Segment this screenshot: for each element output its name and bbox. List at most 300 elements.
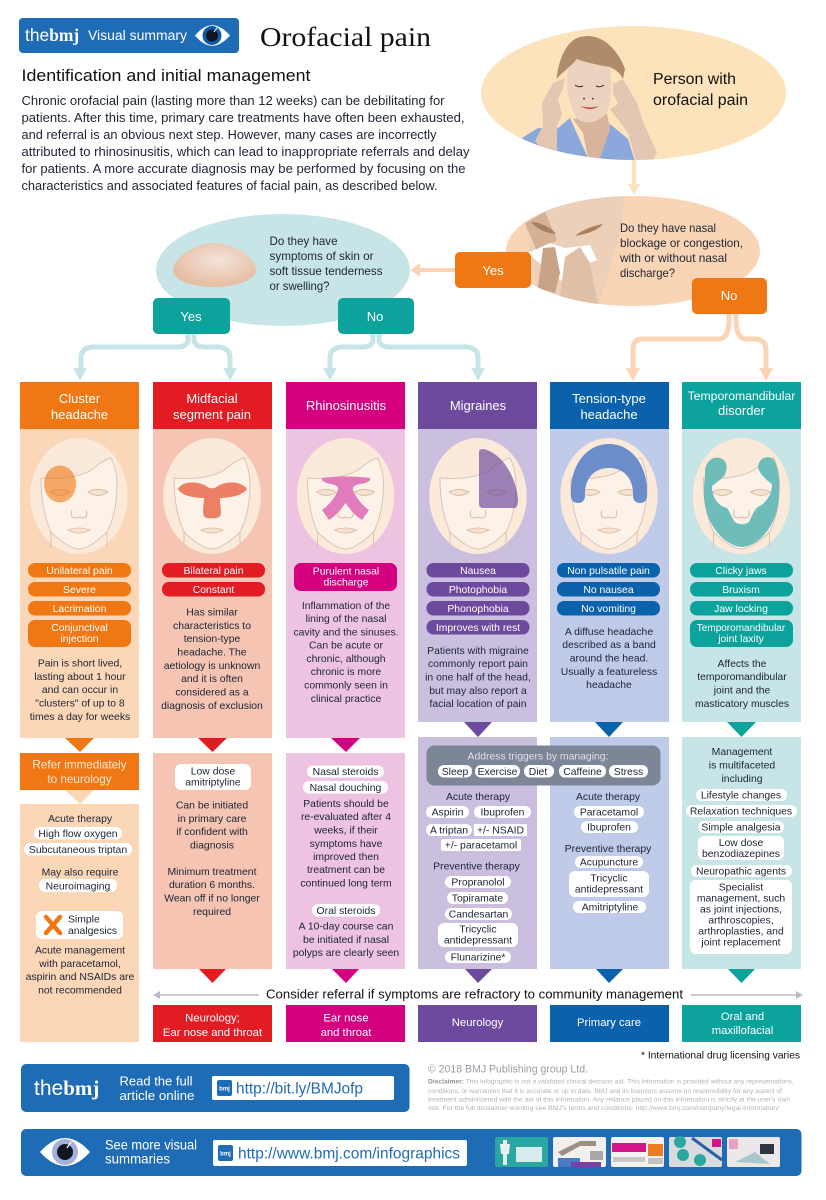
copyright and disclaimer: Disclaimer: This infographic is not a validated clinical decision aid. This information is provided without any representations, xyxy=(428,1078,794,1086)
panel: midfacial management xyxy=(153,753,272,969)
pill: no nausea xyxy=(557,582,660,596)
pill: unilateral pain xyxy=(28,563,131,578)
pill: caffeine xyxy=(559,765,606,778)
pill: paracetamol: +/- paracetamol xyxy=(445,840,517,852)
pill: jaw locking xyxy=(690,601,793,616)
pill: conjunctival injection: Conjunctival xyxy=(51,623,108,634)
pill: phonophobia xyxy=(426,601,530,616)
description: commonly report pain xyxy=(428,659,528,670)
description: cavity and the sinuses. xyxy=(293,628,399,638)
description: aspirin and NSAIDs are xyxy=(26,972,135,983)
description: Minimum treatment xyxy=(168,867,257,878)
description: and can occur in xyxy=(42,685,118,696)
face: midfacial pain area xyxy=(163,438,261,554)
link: bit.ly xyxy=(212,1076,394,1100)
column: cluster headache xyxy=(20,382,139,738)
description: in one half of the head, xyxy=(425,672,531,684)
pill: specialist management xyxy=(690,880,792,954)
box: refer immediately to neurology: to neurology xyxy=(47,773,112,786)
pill: high flow oxygen: High flow oxygen xyxy=(38,829,118,840)
pill: paracetamol: Paracetamol xyxy=(580,808,638,818)
pill: no vomiting: No vomiting xyxy=(581,604,636,615)
column: migraines xyxy=(418,382,537,722)
column header: segment pain xyxy=(173,407,251,422)
column header xyxy=(682,382,801,429)
label xyxy=(653,71,748,109)
label: orofacial pain xyxy=(653,92,748,109)
panel: rhinosinusitis management xyxy=(286,753,405,969)
box: refer neurology xyxy=(418,1005,537,1042)
question text: Do they have nasal xyxy=(620,222,716,235)
pill: sleep xyxy=(438,765,472,778)
pill: bruxism: Bruxism xyxy=(722,585,760,596)
pill: specialist management: management, such xyxy=(697,894,785,904)
column header: Cluster xyxy=(59,391,101,406)
description: re-evaluated after 4 xyxy=(301,812,391,823)
column header: Midfacial xyxy=(186,391,238,406)
description: treatment can be xyxy=(307,865,385,876)
illustration: woman holding head xyxy=(522,36,657,165)
arrow: person to nasal question xyxy=(628,158,640,195)
button: skin no xyxy=(338,298,414,334)
description xyxy=(30,658,130,723)
button: nasal no: No xyxy=(721,288,737,303)
panel: nasal question xyxy=(506,190,760,310)
description: times a day for weeks xyxy=(30,712,130,723)
pill: nsaid: +/- NSAID xyxy=(477,826,524,836)
pill: severe: Severe xyxy=(63,585,96,596)
pill: conjunctival injection xyxy=(28,620,131,647)
subtitle: Identification and initial management xyxy=(22,67,311,85)
copyright and disclaimer: risk. For the full disclaimer wording see BMJ's terms and conditions: http://www.bmj.com/company/legal-information/ xyxy=(428,1105,779,1112)
button: skin no: No xyxy=(367,309,383,324)
description: Management xyxy=(712,747,772,758)
pill: nausea xyxy=(426,563,530,578)
column header: headache xyxy=(580,407,638,422)
connector: skin yes xyxy=(81,334,230,375)
pill: aspirin xyxy=(426,806,469,818)
description: is multifaceted xyxy=(709,760,775,772)
panel: migraines management xyxy=(418,737,537,969)
pill: tricyclic antidepressant: antidepressant xyxy=(575,884,643,896)
question text: or swelling? xyxy=(270,280,330,293)
column header: Migraines xyxy=(450,398,507,413)
column: midfacial segment pain xyxy=(153,382,272,738)
pill: subcutaneous triptan: Subcutaneous triptan xyxy=(29,845,127,856)
description: including xyxy=(721,774,763,785)
pill: specialist management: arthroplasties, and xyxy=(698,926,784,938)
pill: neuropathic agents: Neuropathic agents xyxy=(696,866,786,878)
description xyxy=(164,800,260,918)
pill: purulent nasal discharge: discharge xyxy=(323,578,369,588)
link: bit.ly: http://bit.ly/BMJofp xyxy=(236,1080,363,1098)
pill: specialist management: joint replacement xyxy=(700,938,781,948)
description: Wean off if no longer xyxy=(164,894,260,904)
pill: topiramate: Topiramate xyxy=(452,894,503,904)
label: acute therapy: Acute therapy xyxy=(576,792,641,803)
description: lining of the nasal xyxy=(306,614,386,625)
description: if confident with xyxy=(176,827,248,838)
face: band around head xyxy=(560,438,658,554)
arrowheads into columns xyxy=(73,368,773,381)
illustration: skin swelling xyxy=(173,243,256,287)
panel: skin question xyxy=(156,214,410,326)
copyright and disclaimer: © 2018 BMJ Publishing group Ltd. xyxy=(428,1064,588,1076)
pill: clicky jaws: Clicky jaws xyxy=(715,566,767,577)
pill: amitriptyline: Amitriptyline xyxy=(582,902,639,914)
face: jaw and muscles area xyxy=(693,438,790,554)
description: diagnosis xyxy=(190,840,234,852)
icon: eye xyxy=(195,25,230,46)
pill: lifestyle changes: Lifestyle changes xyxy=(701,790,781,802)
panel: temporomandibular management xyxy=(682,737,801,969)
button: skin yes xyxy=(153,298,230,334)
box: refer neurology ent xyxy=(153,1005,272,1042)
description: facial location of pain xyxy=(429,699,527,710)
description xyxy=(425,646,531,710)
description: Usually a featureless xyxy=(561,667,657,678)
pill: stress: Stress xyxy=(614,767,643,778)
description: lasting about 1 hour xyxy=(34,672,126,683)
banner: read the full article xyxy=(21,1064,410,1112)
pill: neuroimaging xyxy=(39,879,117,892)
description: chronic is more xyxy=(311,667,381,678)
description: in primary care xyxy=(178,814,247,825)
thumbnails: other visual summaries xyxy=(495,1136,780,1167)
panel: cluster headache management xyxy=(20,790,139,1042)
column header: disorder xyxy=(718,403,766,418)
pill: temporomandibular joint laxity: joint laxity xyxy=(717,634,765,645)
button: skin yes: Yes xyxy=(180,309,202,324)
title: Orofacial pain xyxy=(260,22,432,52)
box: refer neurology ent: Neurology; xyxy=(185,1012,240,1024)
pill: aspirin: Aspirin xyxy=(432,808,464,818)
pill: temporomandibular joint laxity: Temporomandibular xyxy=(697,623,786,634)
pill: low dose benzodiazepines: benzodiazepines xyxy=(702,849,780,860)
intro text: and referral is an obvious next step. However, many cases are incorrectly xyxy=(22,127,437,142)
pill: severe xyxy=(28,582,131,596)
pill: diet xyxy=(524,765,554,778)
pill: simple analgesia: Simple analgesia xyxy=(701,822,781,834)
description: oral steroids xyxy=(293,922,399,959)
question text: symptoms of skin or xyxy=(270,250,374,263)
pill: specialist management: arthroscopies, xyxy=(708,916,774,926)
box: refer ear nose and throat: Ear nose xyxy=(323,1012,369,1024)
card: simple analgesics not recommended: Simple xyxy=(68,914,100,926)
pill: ibuprofen xyxy=(474,806,531,818)
description: Can be acute or xyxy=(309,640,384,652)
pill: tricyclic antidepressant xyxy=(438,923,518,947)
description: masticatory muscles xyxy=(695,699,789,710)
column: tension-type headache xyxy=(550,382,669,722)
description: described as a band xyxy=(562,640,656,651)
intro text xyxy=(22,93,470,193)
description: "clusters" of up to 8 xyxy=(35,698,125,710)
pill: constant xyxy=(162,582,265,596)
link: bit.ly: bmj xyxy=(219,1086,230,1092)
pill: a triptan: A triptan xyxy=(430,826,468,836)
description: Inflammation of the xyxy=(302,601,390,612)
description: diagnosis of exclusion xyxy=(161,701,263,712)
description: and it is often xyxy=(181,674,243,685)
description: oral steroids: be initiated if nasal xyxy=(303,935,389,946)
arrow: yes to skin question xyxy=(410,263,456,277)
description: with paracetamol, xyxy=(38,959,121,970)
header badge: the bmj visual summary xyxy=(19,18,239,53)
question text: discharge? xyxy=(620,267,676,280)
pill: lacrimation xyxy=(28,601,131,616)
description xyxy=(293,601,399,705)
panel: tension-type management xyxy=(550,737,669,969)
column header: headache xyxy=(51,407,108,422)
description: aetiology is unknown xyxy=(164,661,260,672)
column header: Temporomandibular xyxy=(688,389,795,403)
description: around the head. xyxy=(570,654,648,664)
box: address triggers xyxy=(426,746,660,786)
pill: photophobia xyxy=(426,582,530,596)
pill: low dose amitriptyline xyxy=(175,764,251,790)
pill: tricyclic antidepressant: Tricyclic xyxy=(459,924,497,936)
face: unilateral pain area xyxy=(30,438,128,554)
description: weeks, if their xyxy=(313,826,378,836)
pill: nausea: Nausea xyxy=(460,566,496,577)
referral line: Consider referral if symptoms are refractory to community management xyxy=(266,988,684,1002)
illustration: person blowing nose xyxy=(525,196,624,304)
pill: tricyclic antidepressant: Tricyclic xyxy=(590,874,628,884)
pill: low dose benzodiazepines xyxy=(698,836,784,860)
description: commonly seen in xyxy=(304,680,388,692)
description: Pain is short lived, xyxy=(38,658,122,670)
label: acute therapy: Acute therapy xyxy=(446,792,511,803)
pill: nasal steroids: Nasal steroids xyxy=(313,767,378,778)
pill: flunarizine: Flunarizine* xyxy=(451,952,505,964)
link: bmj infographics xyxy=(213,1140,467,1166)
column header xyxy=(20,382,139,429)
description: continued long term xyxy=(300,878,392,890)
box: refer ear nose and throat xyxy=(286,1005,405,1042)
label: may also require: May also require xyxy=(42,868,119,878)
description: joint and the xyxy=(713,686,771,696)
column: rhinosinusitis xyxy=(286,382,405,738)
pill: ibuprofen xyxy=(581,821,638,834)
pill: amitriptyline xyxy=(573,901,646,914)
pill: phonophobia: Phonophobia xyxy=(447,604,509,615)
pill: purulent nasal discharge: Purulent nasal xyxy=(313,566,379,578)
pill: acupuncture: Acupuncture xyxy=(580,858,638,868)
intro text: patients. After this time, primary care treatments have often been exhausted, xyxy=(22,110,464,125)
label: acute therapy: Acute therapy xyxy=(48,814,113,825)
description: Patients with migraine xyxy=(427,646,529,657)
pill: stress xyxy=(609,765,648,778)
description: characteristics to xyxy=(173,621,251,632)
box: refer immediately to neurology xyxy=(20,753,139,790)
pill: specialist management: Specialist xyxy=(719,882,763,894)
pill: low dose amitriptyline: amitriptyline xyxy=(185,778,241,788)
question text: soft tissue tenderness xyxy=(270,265,383,278)
column header: Rhinosinusitis xyxy=(306,398,387,413)
description xyxy=(161,608,263,712)
pill: candesartan: Candesartan xyxy=(449,910,508,920)
pill: photophobia: Photophobia xyxy=(449,585,507,596)
link: bmj infographics: bmj xyxy=(220,1152,231,1158)
pill: neuroimaging: Neuroimaging xyxy=(46,882,111,892)
pill: lacrimation: Lacrimation xyxy=(53,604,107,615)
link: bmj infographics: http://www.bmj.com/infographics xyxy=(238,1146,460,1162)
card: simple analgesics not recommended: analgesics xyxy=(68,926,117,937)
banner: read the full article: article online xyxy=(120,1088,194,1103)
pill: ibuprofen: Ibuprofen xyxy=(587,822,631,834)
column header xyxy=(153,382,272,429)
label: preventive therapy: Preventive therapy xyxy=(433,862,521,872)
connector: skin no xyxy=(330,334,478,375)
intro text: attributed to rhinosinusitis, which can lead to inappropriate referrals and delay xyxy=(22,144,470,159)
pill: oral steroids: Oral steroids xyxy=(317,906,375,917)
description: temporomandibular xyxy=(697,672,787,683)
copyright and disclaimer xyxy=(428,1064,794,1112)
banner: read the full article: Read the full xyxy=(120,1074,193,1088)
arrows: symptoms to management xyxy=(65,722,756,752)
question text xyxy=(619,222,743,280)
description: A diffuse headache xyxy=(565,627,653,638)
pill: temporomandibular joint laxity xyxy=(690,620,793,647)
pill: nasal douching: Nasal douching xyxy=(310,783,382,794)
header badge: the bmj visual summary: Visual summary xyxy=(88,28,187,43)
pill: bruxism xyxy=(690,582,793,596)
button: nasal yes: Yes xyxy=(482,263,504,278)
card: simple analgesics not recommended xyxy=(36,911,123,939)
banner: see more visual summaries xyxy=(21,1129,802,1176)
description: Acute management xyxy=(35,946,125,956)
description: clinical practice xyxy=(311,694,381,705)
pill: diet: Diet xyxy=(529,767,547,778)
pill: non pulsatile pain xyxy=(557,563,660,578)
pill: caffeine: Caffeine xyxy=(563,767,602,778)
intro text: characteristics and associated features of facial pain, as described below. xyxy=(22,178,438,193)
icon: eye xyxy=(40,1138,90,1166)
description: chronic, although xyxy=(306,654,386,665)
question text: blockage or congestion, xyxy=(620,237,743,250)
description xyxy=(695,659,789,710)
box: refer oral and maxillofacial: Oral and xyxy=(721,1011,764,1023)
description: duration 6 months. xyxy=(169,880,255,891)
box: refer immediately to neurology: Refer immediately xyxy=(32,758,127,772)
pill: sleep: Sleep xyxy=(442,767,469,778)
description: required xyxy=(193,907,231,918)
pill: bilateral pain xyxy=(162,563,265,578)
pill: improves with rest: Improves with rest xyxy=(436,623,520,634)
icon: orange cross xyxy=(46,917,60,933)
box: refer neurology ent: Ear nose and throat xyxy=(163,1027,263,1039)
question text: with or without nasal xyxy=(619,252,727,265)
pill: bilateral pain: Bilateral pain xyxy=(183,566,244,577)
box: refer oral and maxillofacial xyxy=(682,1005,801,1042)
box: refer primary care: Primary care xyxy=(577,1017,641,1029)
description: oral steroids: polyps are clearly seen xyxy=(293,948,399,959)
pill: tricyclic antidepressant: antidepressant xyxy=(444,936,512,946)
pill: specialist management: as joint injections, xyxy=(700,904,782,916)
pill: constant: Constant xyxy=(193,585,234,596)
face: half head pain area xyxy=(429,438,527,554)
box: refer oral and maxillofacial: maxillofacial xyxy=(712,1025,773,1037)
column header xyxy=(418,382,537,429)
intro text: for patients. A more accurate diagnosis may be performed by focusing on the xyxy=(22,161,466,176)
button: nasal yes xyxy=(455,252,531,288)
description: Patients should be xyxy=(303,799,389,810)
referral line xyxy=(153,988,803,1002)
header badge: the bmj visual summary: thebmj xyxy=(25,25,79,45)
pill: no nausea: No nausea xyxy=(583,585,634,596)
description xyxy=(26,946,135,996)
banner: see more visual summaries: summaries xyxy=(105,1150,170,1166)
copyright and disclaimer: treatment administered with the aid of this information. Any reliance placed on this information is strictly at the user's own xyxy=(428,1096,790,1104)
column header: Tension-type xyxy=(572,391,646,406)
description: considered as a xyxy=(175,688,249,698)
label: preventive therapy: Preventive therapy xyxy=(565,844,652,855)
description xyxy=(561,627,657,691)
pill: ibuprofen: Ibuprofen xyxy=(481,808,525,818)
question text xyxy=(270,235,383,293)
description: headache. The xyxy=(177,648,247,658)
pill: non pulsatile pain: Non pulsatile pain xyxy=(567,566,650,577)
description: symptoms have xyxy=(310,839,383,850)
description: but may also report a xyxy=(429,686,527,697)
description: oral steroids: A 10-day course can xyxy=(299,922,394,932)
banner: see more visual summaries: See more visual xyxy=(105,1136,197,1152)
copyright and disclaimer: conditions, or warranties that it is accurate or up to date. BMJ and its licensors assume no responsibility for any aspect of xyxy=(428,1088,782,1095)
pill: conjunctival injection: injection xyxy=(60,634,99,645)
panel: person with orofacial pain xyxy=(481,26,786,165)
box: refer neurology: Neurology xyxy=(452,1017,504,1029)
description: Affects the xyxy=(718,659,767,670)
banner: read the full article: thebmj xyxy=(34,1076,99,1100)
description xyxy=(300,799,392,890)
arrows: management to referral xyxy=(199,969,755,983)
intro text: Chronic orofacial pain (lasting more than 12 weeks) can be debilitating for xyxy=(22,93,445,108)
pill: low dose amitriptyline: Low dose xyxy=(191,766,235,778)
box: refer ear nose and throat: and throat xyxy=(321,1027,372,1039)
pill: propranolol: Propranolol xyxy=(451,878,505,888)
footnote: * International drug licensing varies xyxy=(641,1050,800,1062)
pill: low dose benzodiazepines: Low dose xyxy=(719,838,763,849)
connector: nasal no xyxy=(633,314,766,375)
pill: clicky jaws xyxy=(690,563,793,578)
box: refer primary care xyxy=(550,1005,669,1042)
description: Can be initiated xyxy=(176,800,248,812)
description: improved then xyxy=(313,852,379,863)
description: headache xyxy=(586,680,632,691)
question text: Do they have xyxy=(270,235,338,248)
description xyxy=(709,747,775,785)
box: address triggers: Address triggers by managing: xyxy=(468,752,608,762)
column header xyxy=(286,382,405,429)
column: temporomandibular disorder xyxy=(682,382,801,722)
pill: jaw locking: Jaw locking xyxy=(714,604,768,615)
column header xyxy=(550,382,669,429)
face: sinus area xyxy=(297,438,394,554)
button: nasal no xyxy=(692,278,767,314)
description: Has similar xyxy=(186,608,238,618)
pill: relaxation techniques: Relaxation techniques xyxy=(690,806,792,818)
pill: no vomiting xyxy=(557,601,660,616)
label: Person with xyxy=(653,71,736,88)
description: tension-type xyxy=(184,634,241,645)
pill: purulent nasal discharge xyxy=(294,563,397,591)
description: not recommended xyxy=(38,986,122,996)
pill: unilateral pain: Unilateral pain xyxy=(46,566,113,577)
pill: exercise: Exercise xyxy=(478,767,518,778)
pill: tricyclic antidepressant xyxy=(569,871,649,897)
pill: improves with rest xyxy=(426,620,530,634)
